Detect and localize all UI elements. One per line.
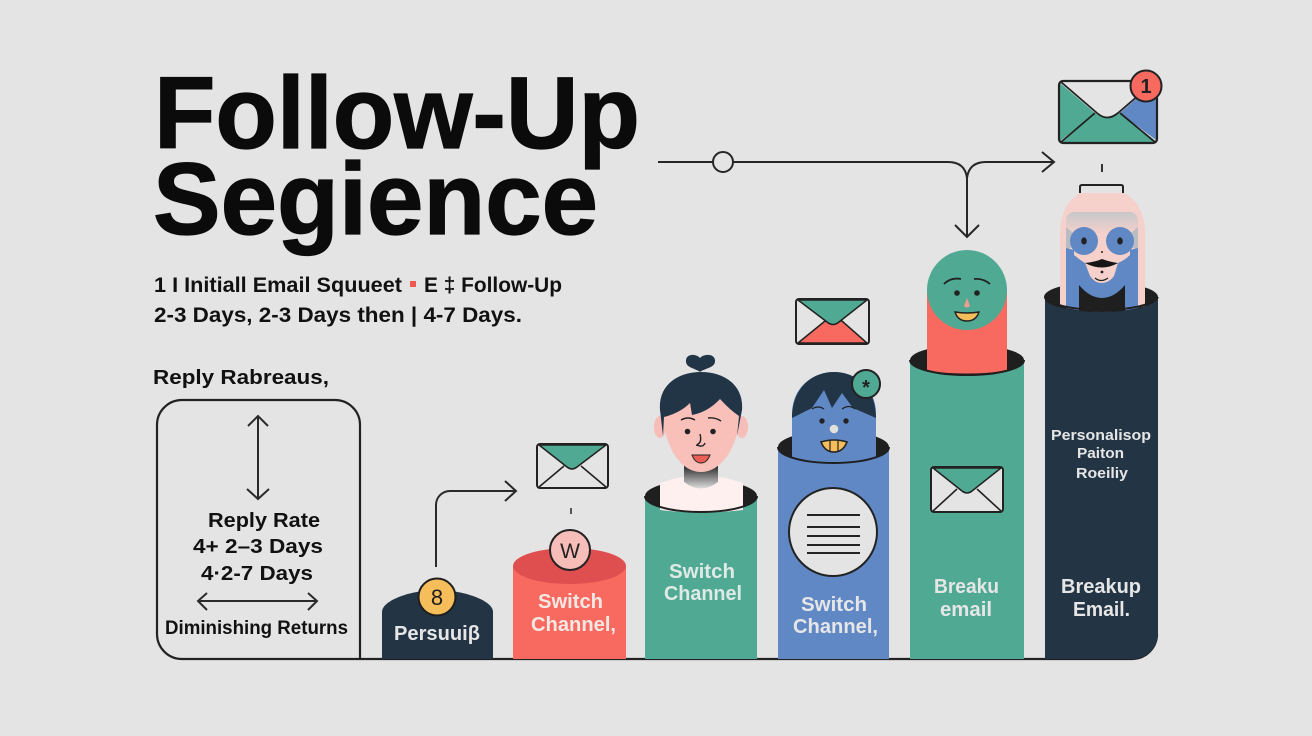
diminishing returns label: Diminishing Returns bbox=[165, 618, 348, 639]
reply rate text: 4+ 2–3 Days bbox=[193, 536, 323, 558]
personalisation text: Personalisop bbox=[1051, 427, 1151, 444]
badge: pink letter: W bbox=[560, 540, 580, 563]
personalisation text: Paiton bbox=[1077, 445, 1124, 462]
bar 2 label: Switch bbox=[538, 591, 603, 613]
bar 1: persuasion bbox=[382, 578, 493, 659]
person: woman with bun bbox=[654, 355, 748, 512]
bar 6 label: Breakup bbox=[1061, 576, 1141, 598]
bar 2 label: Channel, bbox=[531, 614, 616, 636]
icon: envelope with notification: 1 bbox=[1140, 76, 1152, 98]
bar 3: switch channel bbox=[645, 355, 757, 659]
bar 2 label bbox=[531, 591, 616, 636]
subtitle text: 2-3 Days, 2-3 Days then | 4-7 Days. bbox=[154, 304, 522, 327]
bar 3 label: Switch bbox=[669, 561, 735, 583]
bar 3 label: Channel bbox=[664, 583, 742, 605]
reply rate text: Reply Rate bbox=[208, 510, 320, 532]
bar 5: breakup email bbox=[910, 250, 1024, 659]
connector arrows bbox=[658, 152, 1054, 237]
subtitle text: 1 I Initiall Email Squueet bbox=[154, 274, 402, 297]
arrow: vertical double bbox=[247, 416, 269, 499]
bar 3 label bbox=[664, 561, 742, 605]
bar 4 label bbox=[793, 594, 878, 638]
person: blue face bbox=[792, 370, 880, 463]
subtitle text bbox=[154, 274, 562, 327]
personalisation text bbox=[1051, 427, 1151, 482]
bar 4: switch channel bbox=[778, 370, 889, 659]
icon: document circle bbox=[789, 488, 877, 576]
bar 1 label: Persuuiβ bbox=[394, 623, 480, 645]
subtitle text: E ‡ Follow-Up bbox=[424, 274, 562, 297]
bar 4 label: Channel, bbox=[793, 616, 878, 638]
person: pink hood with blue face bbox=[1060, 185, 1145, 312]
arrow: horizontal double bbox=[198, 593, 317, 610]
bar 5 label bbox=[934, 576, 999, 621]
bar 5 label: Breaku bbox=[934, 576, 999, 598]
arrow: bar 1 to envelope bbox=[436, 481, 516, 567]
reply rate heading: Reply Rabreaus, bbox=[153, 367, 329, 389]
number badge: 8 bbox=[431, 585, 443, 610]
title: Follow-Up bbox=[154, 56, 640, 170]
personalisation text: Roeiliy bbox=[1076, 465, 1129, 482]
title bbox=[153, 56, 640, 256]
reply rate text bbox=[193, 510, 323, 585]
reply rate text: 4·2-7 Days bbox=[201, 563, 313, 585]
bar 6 label: Email. bbox=[1073, 599, 1130, 621]
icon: envelope with notification bbox=[1059, 70, 1162, 143]
icon: envelope on bar bbox=[931, 467, 1003, 512]
bar 2: switch channel bbox=[513, 530, 626, 659]
bar 6: breakup email bbox=[1044, 185, 1158, 659]
icon: envelope with green flap and coral base bbox=[796, 299, 869, 344]
icon: envelope with green flap bbox=[537, 444, 608, 488]
person: green head bbox=[927, 250, 1007, 374]
panel: reply rate box bbox=[157, 400, 1157, 660]
bar 6 label bbox=[1061, 576, 1141, 621]
title: Segience bbox=[153, 142, 598, 256]
bar 5 label: email bbox=[940, 599, 992, 621]
bar 4 label: Switch bbox=[801, 594, 867, 616]
person: blue face: * bbox=[862, 377, 870, 399]
